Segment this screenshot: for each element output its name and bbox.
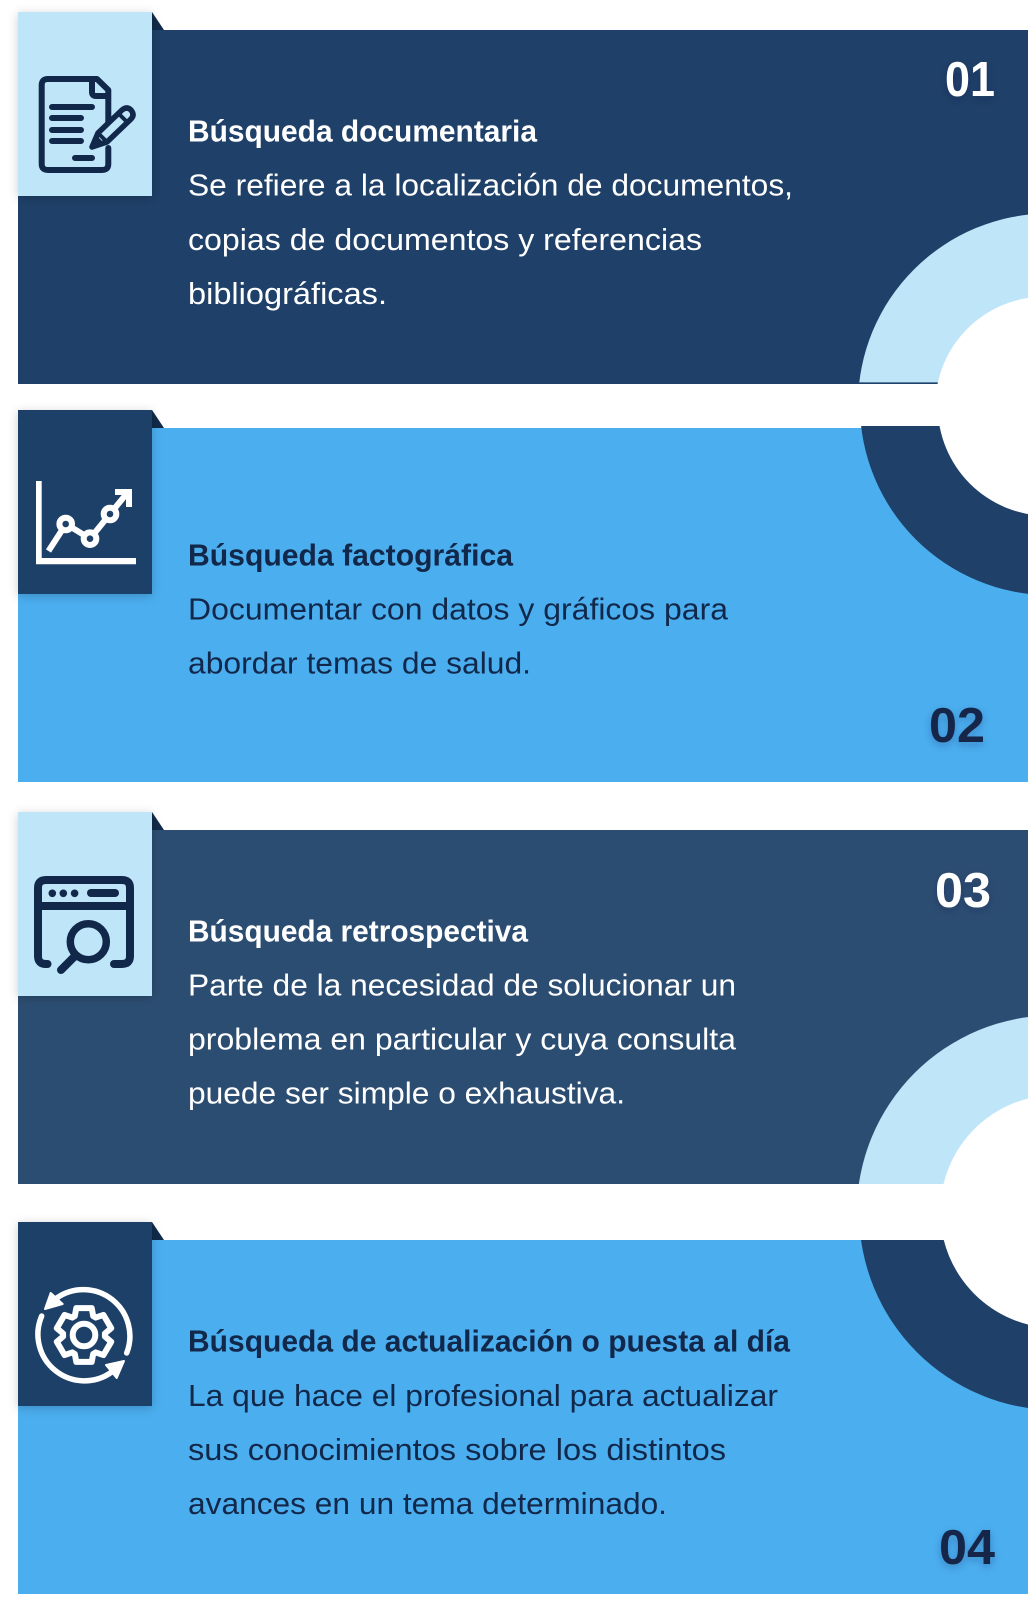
number 04: 04 xyxy=(939,1521,995,1575)
body text: puede ser simple o exhaustiva. xyxy=(188,1076,625,1110)
icon: browser window with magnifier xyxy=(38,880,130,970)
fold triangle xyxy=(152,12,164,30)
icon: rising line chart xyxy=(36,481,136,564)
heading: Búsqueda de actualización o puesta al día xyxy=(188,1324,791,1358)
icon: document with pencil xyxy=(42,79,133,170)
inner white disc xyxy=(944,1098,1028,1184)
icon tile: gear cycle xyxy=(18,1222,152,1406)
body text: Parte de la necesidad de solucionar un xyxy=(188,968,736,1002)
body text: bibliográficas. xyxy=(188,276,387,311)
panel: búsqueda retrospectiva xyxy=(14,810,1028,1184)
body text: La que hace el profesional para actualizar xyxy=(188,1378,778,1413)
body text xyxy=(188,968,737,1110)
icon tile: chart xyxy=(18,410,152,594)
body text: problema en particular y cuya consulta xyxy=(188,1022,737,1056)
decorative ring: light arc xyxy=(859,214,1028,382)
body text: copias de documentos y referencias xyxy=(188,222,702,257)
decorative ring: light arc xyxy=(858,1017,1028,1184)
panel: búsqueda factográfica xyxy=(14,408,1028,782)
icon: gear with circular arrows xyxy=(38,1290,130,1381)
number 03: 03 xyxy=(935,864,991,918)
icon tile: document xyxy=(18,12,152,196)
inner white disc xyxy=(940,426,1028,514)
body text: sus conocimientos sobre los distintos xyxy=(188,1432,726,1467)
fold triangle xyxy=(152,812,164,830)
icon tile: browser search xyxy=(18,812,152,996)
panel: búsqueda documentaria xyxy=(14,10,1028,384)
fold triangle xyxy=(152,1222,164,1240)
body text xyxy=(188,592,729,680)
number 01: 01 xyxy=(945,53,995,107)
decorative ring: dark arc xyxy=(861,1240,1028,1408)
heading: Búsqueda documentaria xyxy=(188,114,538,148)
heading: Búsqueda retrospectiva xyxy=(188,914,529,948)
fold triangle xyxy=(152,410,164,428)
body text xyxy=(188,168,793,311)
number 02: 02 xyxy=(929,699,985,753)
body text xyxy=(188,1378,778,1521)
body text: avances en un tema determinado. xyxy=(188,1486,667,1521)
inner white disc xyxy=(944,1240,1028,1324)
body text: abordar temas de salud. xyxy=(188,646,531,680)
body text: Se refiere a la localización de documentos, xyxy=(188,168,793,202)
inner white disc xyxy=(938,298,1028,384)
body text: Documentar con datos y gráficos para xyxy=(188,592,729,626)
heading: Búsqueda factográfica xyxy=(188,538,514,572)
panel: búsqueda de actualización xyxy=(14,1220,1028,1594)
decorative ring: dark arc xyxy=(861,426,1028,594)
